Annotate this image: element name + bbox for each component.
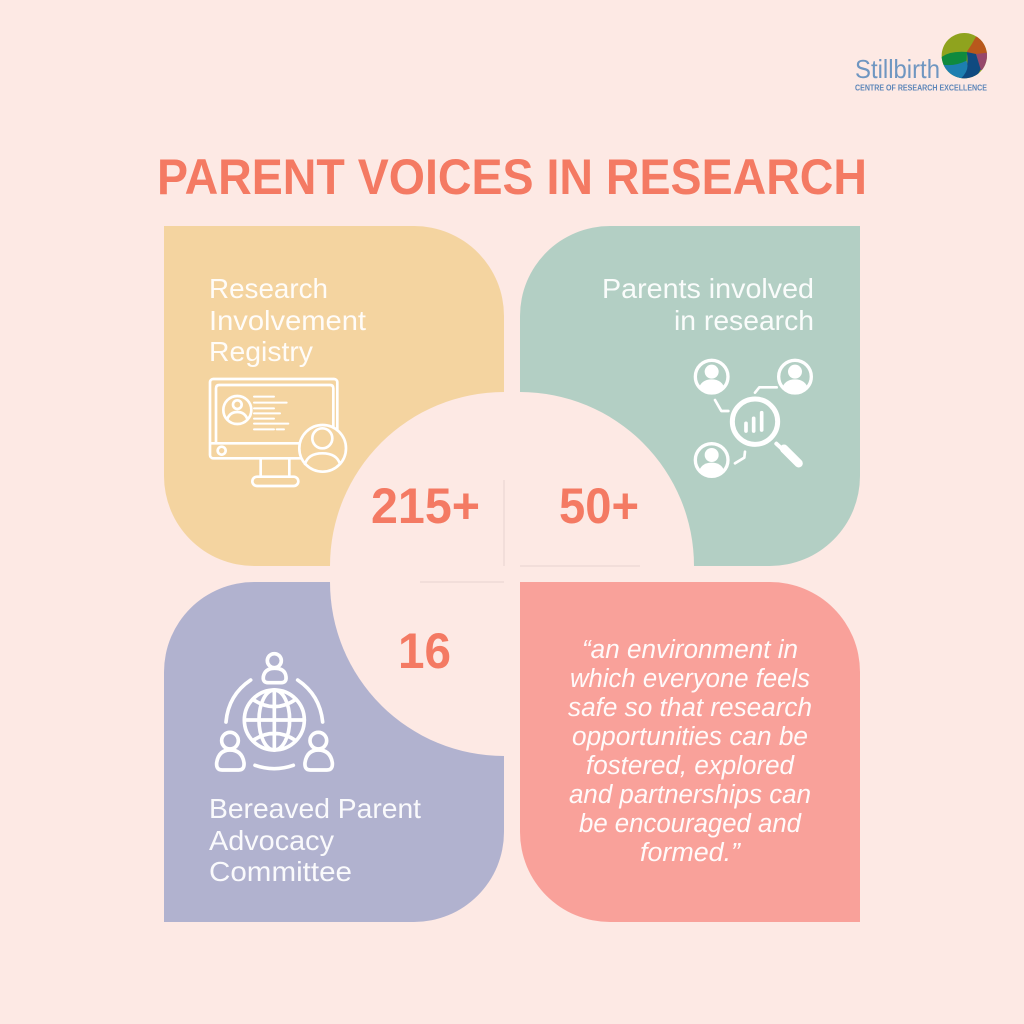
statistic: 50+: 50+ xyxy=(559,478,639,534)
quote text: fostered, explored xyxy=(586,752,795,780)
panel: quote xyxy=(520,582,860,922)
heading: Research xyxy=(209,273,328,304)
icon: magnifier linking three people xyxy=(695,360,811,477)
statistic: 215+: 215+ xyxy=(371,478,480,534)
logo icon: multicolour circle xyxy=(942,33,987,78)
quote text xyxy=(568,636,812,867)
panel background xyxy=(164,226,504,566)
quarter circle: bottom left xyxy=(330,582,504,756)
quote text: opportunities can be xyxy=(572,723,808,751)
heading xyxy=(602,273,814,336)
heading xyxy=(209,793,421,887)
icon: monitor with user profile xyxy=(210,379,346,486)
heading: Bereaved Parent xyxy=(209,793,421,824)
icon: globe surrounded by three people xyxy=(217,654,332,770)
panel background xyxy=(520,226,860,566)
logo wordmark: Stillbirth xyxy=(855,54,940,84)
panel background xyxy=(164,582,504,922)
heading: Registry xyxy=(209,336,313,367)
logo tagline: CENTRE OF RESEARCH EXCELLENCE xyxy=(855,84,988,92)
heading: in research xyxy=(674,305,814,336)
statistic: 16: 16 xyxy=(398,623,451,679)
quarter circle: top left xyxy=(330,392,504,566)
quote text: formed.” xyxy=(640,839,742,867)
panel: Research Involvement Registry xyxy=(164,226,504,566)
quote text: which everyone feels xyxy=(570,665,810,693)
heading xyxy=(209,273,366,367)
heading: Advocacy xyxy=(209,825,334,856)
heading: Committee xyxy=(209,856,352,887)
heading: Involvement xyxy=(209,305,366,336)
quote text: be encouraged and xyxy=(579,810,802,838)
panel: Bereaved Parent Advocacy Committee xyxy=(164,582,504,922)
quote text: and partnerships can xyxy=(569,781,811,809)
title: PARENT VOICES IN RESEARCH xyxy=(157,149,867,205)
centre: quarter circles with statistics xyxy=(330,392,694,756)
heading: Parents involved xyxy=(602,273,814,304)
logo: Stillbirth Centre of Research Excellence xyxy=(855,32,990,92)
panel background xyxy=(520,582,860,922)
panel: Parents involved in research xyxy=(520,226,860,566)
quarter circle: top right xyxy=(520,392,694,566)
quote text: “an environment in xyxy=(582,636,798,664)
quote text: safe so that research xyxy=(568,694,812,722)
